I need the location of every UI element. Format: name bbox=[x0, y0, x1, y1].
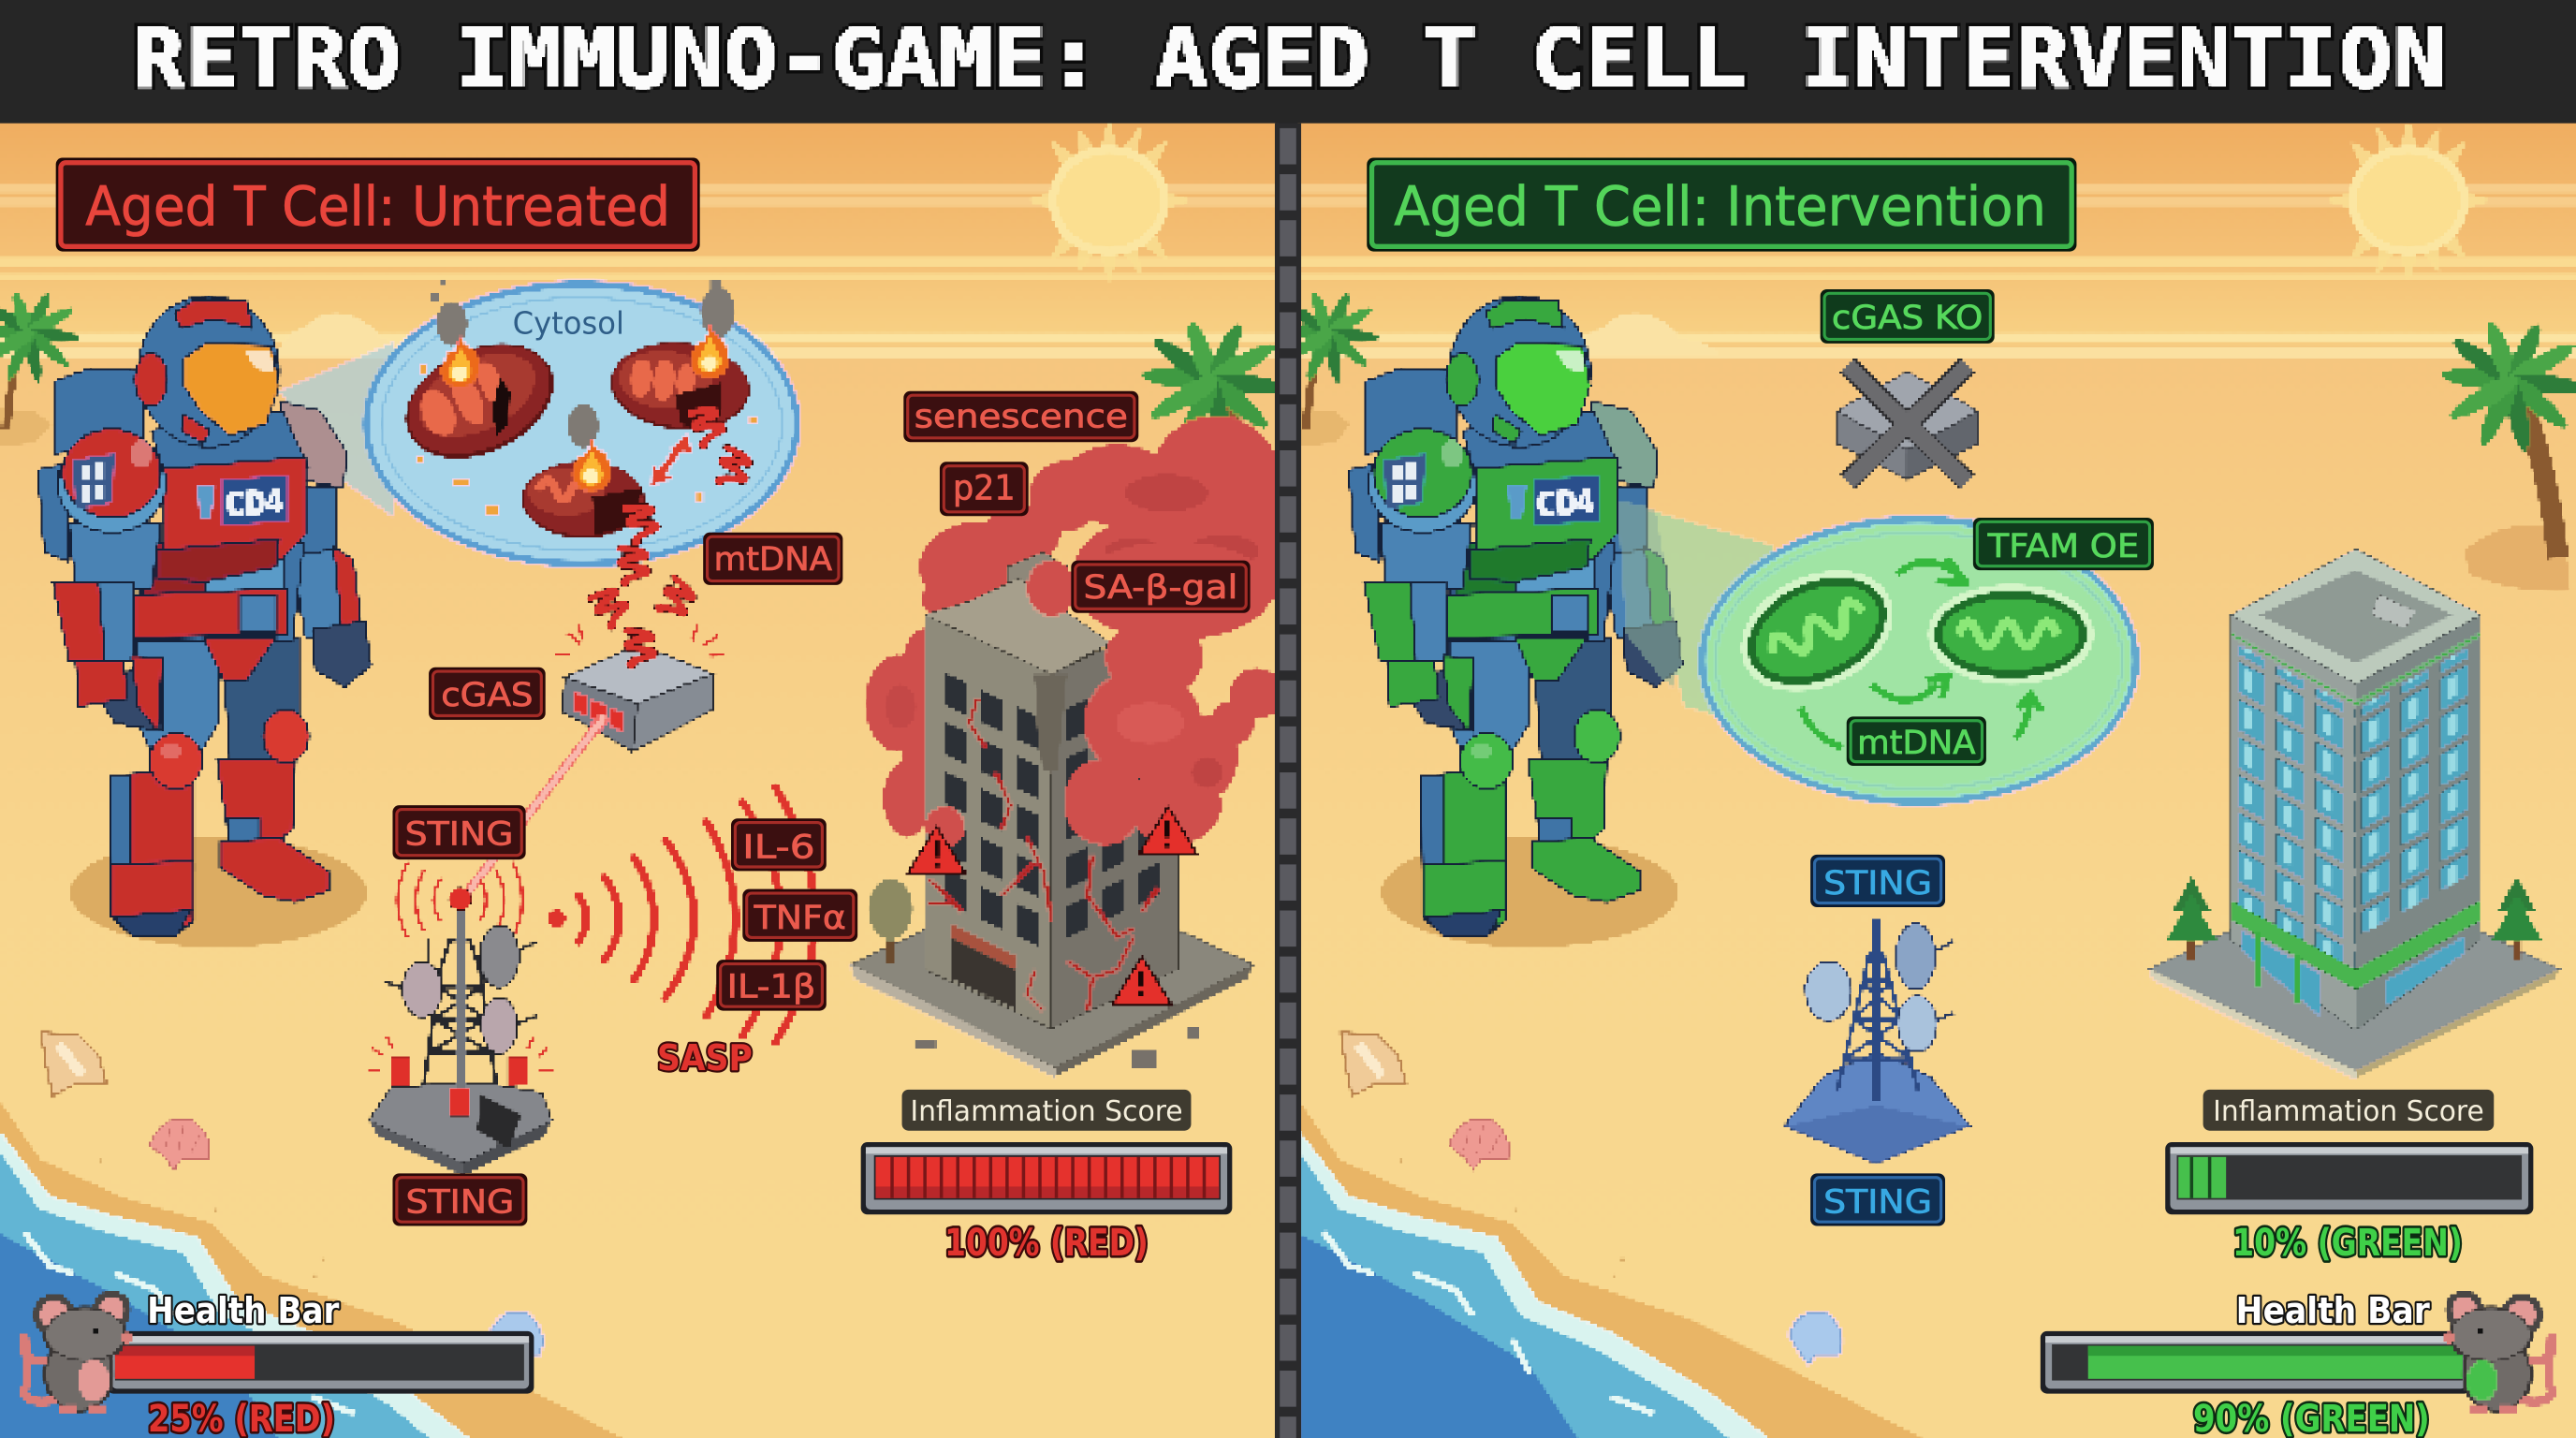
mitochondrion 3 bbox=[520, 461, 646, 539]
label: cGAS bbox=[429, 668, 546, 720]
inflammation score, intervention: Inflammation Score bbox=[2213, 1095, 2484, 1128]
centre divider bbox=[1275, 124, 1301, 1438]
smoke puffs bbox=[431, 279, 736, 448]
mitochondrion 2 bbox=[606, 336, 754, 436]
label: IL-6: IL-6 bbox=[742, 828, 815, 866]
label: p21 bbox=[940, 462, 1029, 516]
icon: mouse bbox=[2445, 1292, 2553, 1412]
inflammation bar bbox=[2165, 1142, 2533, 1214]
label: STING upper bbox=[392, 805, 526, 859]
recycling arrows bbox=[1801, 557, 2042, 748]
astronaut T cell, red: CD4 bbox=[225, 482, 285, 525]
label: STING upper: STING bbox=[1823, 864, 1932, 902]
pixel artwork, intervention bbox=[1278, 120, 2576, 1438]
cGAS router icon bbox=[555, 624, 726, 751]
label: TNF-alpha: TNFα bbox=[754, 899, 846, 937]
label: STING upper bbox=[1810, 855, 1945, 907]
healthy mitochondrion 1 bbox=[1722, 549, 1911, 713]
label: STING upper: STING bbox=[405, 814, 513, 853]
small tree bbox=[868, 877, 914, 964]
mitochondrion 1 bbox=[386, 320, 574, 482]
panel heading: intervention bbox=[1367, 158, 2076, 252]
astronaut T cell, green bbox=[1349, 296, 1682, 948]
laser beam bbox=[465, 716, 605, 896]
label: SASP: SASP bbox=[657, 1037, 753, 1079]
healthy building bbox=[2149, 549, 2559, 1079]
panel: intervention aged T cell bbox=[1278, 120, 2576, 1438]
flames bbox=[441, 326, 729, 491]
label: IL-1beta: IL-1β bbox=[727, 968, 815, 1006]
SASP signal waves bbox=[547, 787, 815, 1042]
label: TFAM OE: TFAM OE bbox=[1987, 527, 2139, 565]
warning icons bbox=[907, 807, 1197, 1005]
label: TFAM OE bbox=[1973, 518, 2154, 570]
label: STING lower: STING bbox=[1823, 1183, 1932, 1222]
mtDNA fragments bbox=[592, 406, 752, 629]
health bar track bbox=[107, 1331, 534, 1394]
inflammation value: 10% (GREEN) bbox=[2232, 1221, 2463, 1265]
healthy mitochondrion 2 bbox=[1928, 585, 2093, 683]
astronaut T cell, red bbox=[37, 296, 372, 948]
label: mtDNA bbox=[703, 533, 842, 585]
label: mtDNA: mtDNA bbox=[714, 540, 832, 579]
pixel artwork, untreated bbox=[0, 120, 1301, 1438]
label: cGAS KO bbox=[1821, 289, 1995, 344]
zoom cone bbox=[1636, 506, 1775, 723]
label: SA-beta-gal bbox=[1071, 561, 1251, 613]
label: IL-6 bbox=[731, 818, 827, 871]
health bar, intervention: Health Bar bbox=[2236, 1290, 2430, 1332]
double arrow bbox=[659, 447, 681, 477]
panel heading: untreated bbox=[56, 158, 700, 252]
ruined building bbox=[849, 542, 1284, 1078]
label: SA-beta-gal: SA-β-gal bbox=[1083, 568, 1237, 607]
health bar, untreated bbox=[23, 1290, 534, 1438]
label: IL-1beta bbox=[716, 960, 827, 1011]
title bar bbox=[0, 0, 2576, 124]
label: cGAS: cGAS bbox=[441, 676, 534, 714]
panel heading: intervention: Aged T Cell: Intervention bbox=[1394, 174, 2046, 238]
translucent arm highlight bbox=[1618, 501, 1682, 690]
inflammation score, intervention bbox=[2165, 1090, 2533, 1265]
inflammation score, untreated bbox=[861, 1090, 1232, 1265]
tree left bbox=[2165, 874, 2217, 961]
red smoke behind building bbox=[864, 416, 1301, 838]
label: mtDNA: mtDNA bbox=[1857, 724, 1976, 762]
panel: untreated aged T cell bbox=[0, 120, 1301, 1438]
broadcast tower, red alarm bbox=[368, 863, 553, 1177]
label: mtDNA bbox=[1847, 716, 1986, 766]
health bar, intervention bbox=[2041, 1290, 2553, 1438]
label: senescence bbox=[903, 391, 1138, 442]
label: STING lower: STING bbox=[406, 1183, 514, 1222]
inflammation value: 100% (RED) bbox=[944, 1221, 1149, 1265]
icon: mouse bbox=[23, 1292, 131, 1412]
label: senescence: senescence bbox=[915, 397, 1128, 435]
orange debris bbox=[416, 365, 757, 514]
cytosol bubble with damaged mitochondria bbox=[366, 279, 797, 564]
inflammation score, untreated: Inflammation Score bbox=[910, 1095, 1183, 1128]
cytosol bubble with healthy mitochondria bbox=[1702, 520, 2136, 802]
health bar track bbox=[2041, 1331, 2471, 1394]
label: p21: p21 bbox=[953, 468, 1016, 508]
label: STING lower bbox=[1810, 1173, 1945, 1226]
zoom cone bbox=[279, 342, 394, 518]
cytosol label: Cytosol bbox=[513, 304, 624, 341]
health bar, untreated: Health Bar bbox=[147, 1290, 339, 1332]
beach background bbox=[1278, 120, 2576, 1438]
icon: inactive blue tower bbox=[1784, 918, 1969, 1164]
beach background bbox=[0, 120, 1285, 1438]
panel heading: untreated: Aged T Cell: Untreated bbox=[85, 174, 670, 238]
astronaut T cell, green: CD4 bbox=[1536, 482, 1596, 525]
red smoke in front of building bbox=[925, 542, 1284, 846]
inflammation bar bbox=[861, 1142, 1232, 1214]
tree right bbox=[2491, 874, 2543, 961]
label: TNF-alpha bbox=[742, 889, 857, 942]
label: cGAS KO: cGAS KO bbox=[1832, 299, 1983, 337]
title: RETRO IMMUNO-GAME: AGED T CELL INTERVENTION bbox=[131, 11, 2446, 107]
icon: crossed-out cGAS router bbox=[1837, 365, 1978, 483]
label: STING lower bbox=[392, 1173, 527, 1226]
